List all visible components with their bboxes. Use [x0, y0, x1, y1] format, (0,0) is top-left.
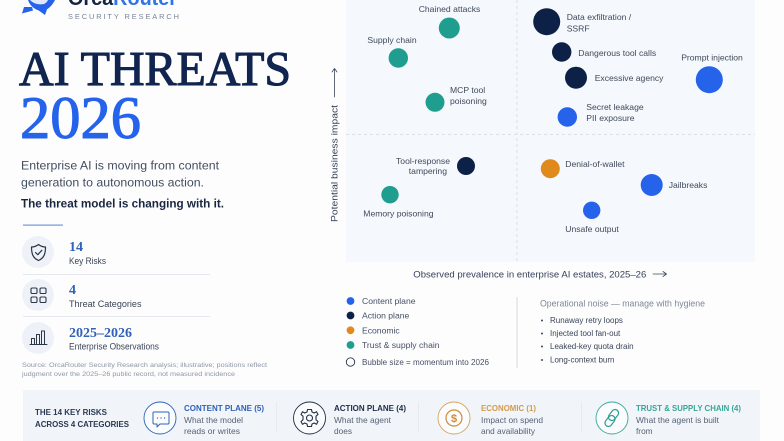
bubble: jailbreaks [641, 174, 707, 196]
logo: OrcaRouter Security Research [22, 0, 179, 21]
operational noise list: Operational noise — manage with hygiene [540, 298, 705, 308]
arrow: y axis [332, 68, 337, 97]
bubble: excessive agency [565, 67, 664, 89]
intro text: The threat model is changing with it. [21, 196, 224, 210]
category: content plane: What the model [184, 415, 243, 425]
category: action plane: does [334, 426, 352, 436]
bubble: denial-of-wallet [541, 159, 625, 178]
title: AI THREATS [19, 41, 291, 96]
category: content plane [144, 402, 264, 436]
bubble: secret leakage: Secret leakage [586, 102, 644, 112]
icon: chain link [604, 408, 620, 428]
bubble: MCP tool poisoning: poisoning [450, 96, 487, 106]
stats panel [22, 236, 210, 354]
bubble: tool-response tampering: Tool-response [396, 156, 450, 166]
bubble: supply chain: Supply chain [367, 35, 417, 45]
stat: 2025–2026 enterprise observations: Enterprise Observations [69, 342, 160, 352]
bubble: jailbreaks: Jailbreaks [669, 180, 707, 190]
legend [346, 296, 489, 367]
category: action plane: What the agent [334, 415, 392, 425]
list items: Runaway retry loops [550, 316, 623, 325]
stat: 2025–2026 enterprise observations: 2025–2026 [69, 326, 132, 341]
category: action plane: ACTION PLANE (4) [334, 403, 406, 413]
operational noise list [540, 298, 705, 364]
bubble: data exfiltration: SSRF [567, 24, 590, 34]
category: trust and supply chain [596, 402, 741, 436]
bottom band: categories [23, 390, 760, 441]
title: 2026 [20, 85, 141, 151]
list items: Leaked-key quota drain [550, 342, 634, 351]
bubble: chained attacks: Chained attacks [419, 4, 480, 14]
brand tagline: SECURITY RESEARCH [68, 12, 179, 21]
intro text: Enterprise AI is moving from content [21, 158, 220, 172]
legend: economic: Economic [362, 325, 400, 335]
stat: 4 threat categories [22, 279, 142, 311]
x axis label: Observed prevalence in enterprise AI estates, 2025–26 [413, 269, 646, 279]
bubble: dangerous tool calls: Dangerous tool calls [578, 48, 656, 58]
bubble: secret leakage [558, 102, 644, 127]
bubble: supply chain [367, 35, 417, 68]
legend: bubble size: Bubble size = momentum into 2026 [362, 357, 489, 367]
list items: Injected tool fan-out [550, 329, 621, 338]
legend: action plane: Action plane [362, 310, 410, 320]
y axis label [330, 68, 340, 222]
stat: 14 key risks [22, 236, 107, 268]
icon: orca [22, 0, 55, 15]
category: content plane: reads or writes [184, 426, 240, 436]
bubble: tool-response tampering: tampering [409, 166, 447, 176]
bubble: secret leakage: PII exposure [586, 113, 635, 123]
bubble: unsafe output [565, 202, 619, 234]
icon: gear [301, 410, 318, 426]
y axis label: Potential business impact [330, 105, 340, 222]
category: content plane: CONTENT PLANE (5) [184, 403, 264, 413]
category: trust and supply chain: TRUST & SUPPLY CHAIN (4) [636, 403, 741, 413]
category: economic: ECONOMIC (1) [481, 403, 536, 413]
icon: bar chart [30, 331, 47, 344]
bubble: chained attacks [419, 4, 480, 38]
legend: content plane: Content plane [362, 296, 416, 306]
stat: 2025–2026 enterprise observations [22, 322, 160, 354]
icon: grid [31, 288, 46, 302]
stat: 14 key risks: Key Risks [69, 256, 107, 266]
icon: shield [32, 244, 46, 260]
bubble: MCP tool poisoning: MCP tool [450, 85, 485, 95]
bubble: dangerous tool calls [552, 42, 656, 62]
bubble: prompt injection: Prompt injection [681, 52, 743, 62]
source note: judgment over the 2025–26 public record, not measured incidence [21, 371, 235, 378]
category: trust and supply chain: from [636, 426, 653, 436]
list items: Long-context burn [550, 356, 614, 364]
icon: dollar coin: $ [451, 413, 457, 425]
band heading [35, 408, 130, 429]
bubble: denial-of-wallet: Denial-of-wallet [565, 159, 625, 169]
category: economic: Impact on spend [481, 415, 543, 425]
bubble: unsafe output: Unsafe output [565, 224, 619, 234]
list items [541, 316, 634, 364]
stat: 14 key risks: 14 [69, 240, 83, 255]
intro text: generation to autonomous action. [21, 176, 204, 190]
source note: Source: OrcaRouter Security Research analysis; illustrative; positions reflect [22, 362, 267, 369]
bubble: excessive agency: Excessive agency [595, 73, 664, 83]
stat: 4 threat categories: Threat Categories [69, 299, 142, 309]
bubble: memory poisoning: Memory poisoning [363, 209, 434, 219]
bubble: data exfiltration: Data exfiltration / [567, 12, 632, 22]
bubble: prompt injection [681, 52, 743, 93]
category: action plane [294, 402, 406, 436]
band heading: ACROSS 4 CATEGORIES [35, 420, 130, 429]
bubble: tool-response tampering [396, 156, 475, 176]
category: economic [438, 402, 543, 436]
legend: trust and supply chain: Trust & supply chain [362, 340, 440, 350]
bubble: memory poisoning [363, 186, 434, 219]
arrow: x axis [653, 272, 666, 276]
category: economic: and availability [481, 426, 536, 436]
bubble: MCP tool poisoning [426, 85, 487, 112]
intro text [21, 158, 224, 210]
source note [21, 362, 267, 378]
chart: threat matrix [330, 0, 755, 279]
stat: 4 threat categories: 4 [69, 283, 76, 298]
icon: speech bubble [153, 412, 169, 427]
category: trust and supply chain: What the agent is built [636, 415, 720, 425]
bubble: data exfiltration [533, 8, 632, 35]
band heading: THE 14 KEY RISKS [35, 408, 108, 417]
title [19, 41, 291, 151]
